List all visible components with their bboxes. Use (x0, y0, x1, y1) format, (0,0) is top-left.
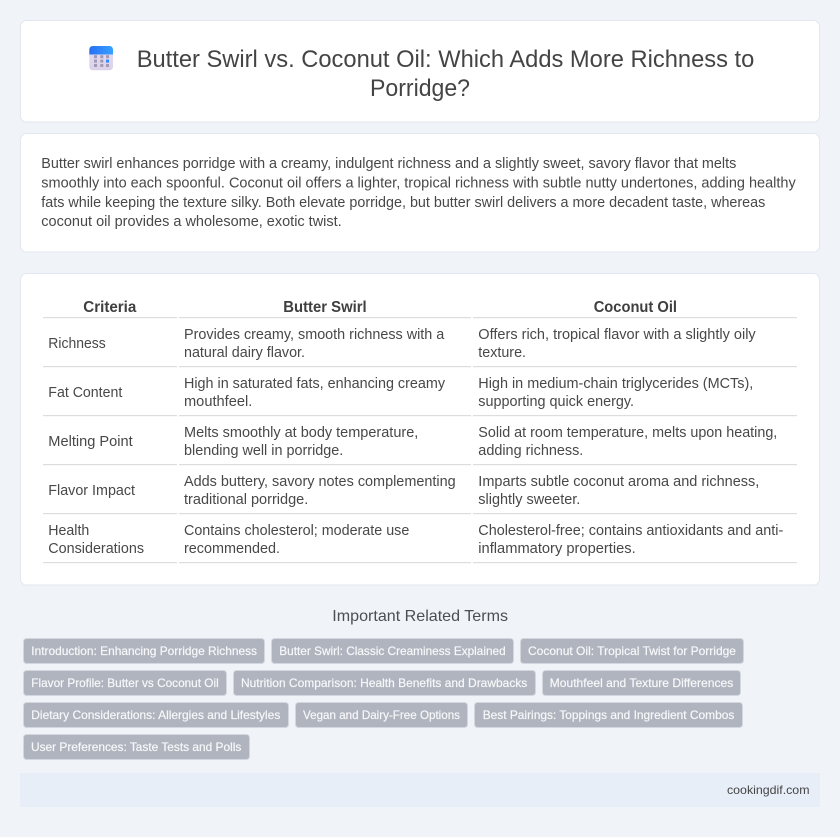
row: melting point: adding richness. (478, 443, 583, 459)
row: flavor impact: slightly sweeter. (478, 492, 580, 508)
intro text: fats while keeping the texture silky. Both elevate porridge, but butter swirl delivers a more decadent taste, whereas (41, 195, 765, 211)
tag row 4: User Preferences: Taste Tests and Polls (31, 740, 241, 754)
related term tags (24, 638, 744, 760)
title (137, 46, 754, 102)
row: richness: Richness (48, 336, 106, 352)
panel: comparison table (20, 274, 820, 585)
tag row 3 (24, 702, 742, 728)
row: richness: Provides creamy, smooth richness with a (184, 327, 444, 343)
row: flavor impact: Imparts subtle coconut aroma and richness, (478, 474, 759, 490)
row: fat content: High in saturated fats, enhancing creamy (184, 376, 446, 392)
tag row 1: Coconut Oil: Tropical Twist for Porridge (528, 644, 736, 658)
tag row 3: Vegan and Dairy-Free Options (303, 708, 460, 722)
row: fat content: mouthfeel. (184, 394, 252, 410)
tag row 1: Butter Swirl: Classic Creaminess Explained (279, 644, 506, 658)
intro text: smoothly into each spoonful. Coconut oil offers a lighter, tropical richness with subtle nutty undertones, adding healthy (41, 175, 797, 191)
row: fat content: High in medium-chain triglycerides (MCTs), (478, 376, 753, 392)
tag row 2: Nutrition Comparison: Health Benefits and Drawbacks (241, 676, 527, 690)
title: Porridge? (370, 75, 470, 102)
row: richness: texture. (478, 345, 526, 361)
icon: calendar (89, 46, 113, 70)
tag row 1: Introduction: Enhancing Porridge Richness (31, 644, 257, 658)
row: fat content: Fat Content (48, 385, 122, 401)
row: health considerations: Cholesterol-free; contains antioxidants and anti- (478, 523, 784, 539)
row: flavor impact: Adds buttery, savory notes complementing (184, 474, 456, 490)
row: flavor impact: Flavor Impact (48, 483, 135, 499)
footer (20, 773, 820, 807)
row: flavor impact: traditional porridge. (184, 492, 308, 508)
tag row 2: Flavor Profile: Butter vs Coconut Oil (31, 676, 219, 690)
row: melting point: Melts smoothly at body temperature, (184, 425, 418, 441)
footer: cookingdif.com (727, 783, 810, 797)
row: richness: Offers rich, tropical flavor with a slightly oily (478, 327, 757, 343)
table header (43, 299, 797, 318)
tag row 4 (24, 734, 250, 760)
intro text (41, 156, 797, 230)
row: melting point (43, 425, 797, 465)
tag row 2: Mouthfeel and Texture Differences (550, 676, 733, 690)
heading: important related terms: Important Related Terms (332, 608, 508, 625)
row: health considerations: inflammatory properties. (478, 541, 636, 557)
tag row 1 (24, 638, 744, 664)
row: health considerations: Health (48, 523, 89, 539)
row: flavor impact (43, 474, 797, 514)
row: richness (43, 327, 797, 367)
table header: Coconut Oil (594, 299, 677, 316)
row: health considerations: recommended. (184, 541, 280, 557)
tag row 2 (24, 670, 740, 696)
row: richness: natural dairy flavor. (184, 345, 305, 361)
row: fat content (43, 376, 797, 416)
intro text: coconut oil provides a wholesome, exotic twist. (41, 214, 342, 230)
tag row 3: Dietary Considerations: Allergies and Lifestyles (31, 708, 280, 722)
row: melting point: Melting Point (48, 434, 133, 450)
table header: Criteria (83, 299, 136, 316)
row: health considerations (43, 523, 797, 563)
table header: Butter Swirl (283, 299, 367, 316)
title: Butter Swirl vs. Coconut Oil: Which Adds More Richness to (137, 46, 754, 73)
row: melting point: blending well in porridge. (184, 443, 343, 459)
row: melting point: Solid at room temperature, melts upon heating, (478, 425, 777, 441)
row: fat content: supporting quick energy. (478, 394, 634, 410)
tag row 3: Best Pairings: Toppings and Ingredient Combos (483, 708, 734, 722)
panel: header (20, 20, 820, 122)
panel: introduction (20, 134, 820, 252)
row: health considerations: Contains cholesterol; moderate use (184, 523, 409, 539)
row: health considerations: Considerations (48, 541, 144, 557)
intro text: Butter swirl enhances porridge with a creamy, indulgent richness and a slightly sweet, savory flavor that melts (41, 156, 736, 172)
